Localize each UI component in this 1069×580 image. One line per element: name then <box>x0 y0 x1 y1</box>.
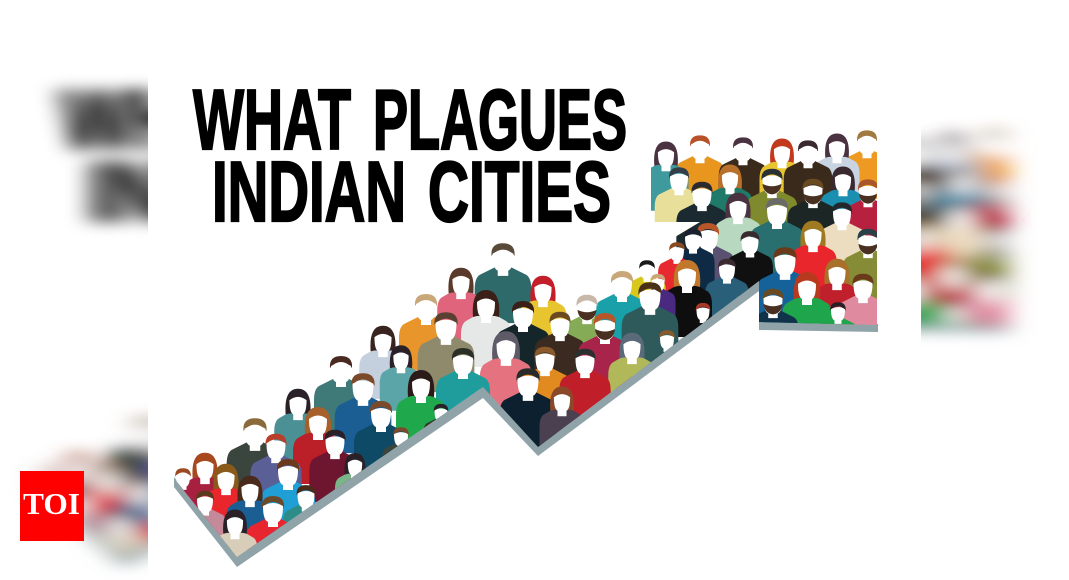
main artwork <box>164 73 894 579</box>
title: PLAGUES <box>373 73 627 168</box>
crowd of people forming the rising arrow <box>164 130 894 579</box>
title: INDIAN <box>212 145 406 240</box>
TOI logo <box>20 471 84 541</box>
arrow base band <box>174 281 878 567</box>
TOI logo: TOI <box>23 486 80 521</box>
title <box>193 73 627 240</box>
title: CITIES <box>428 145 611 240</box>
central white panel <box>148 0 921 580</box>
title: WHAT <box>193 73 351 168</box>
